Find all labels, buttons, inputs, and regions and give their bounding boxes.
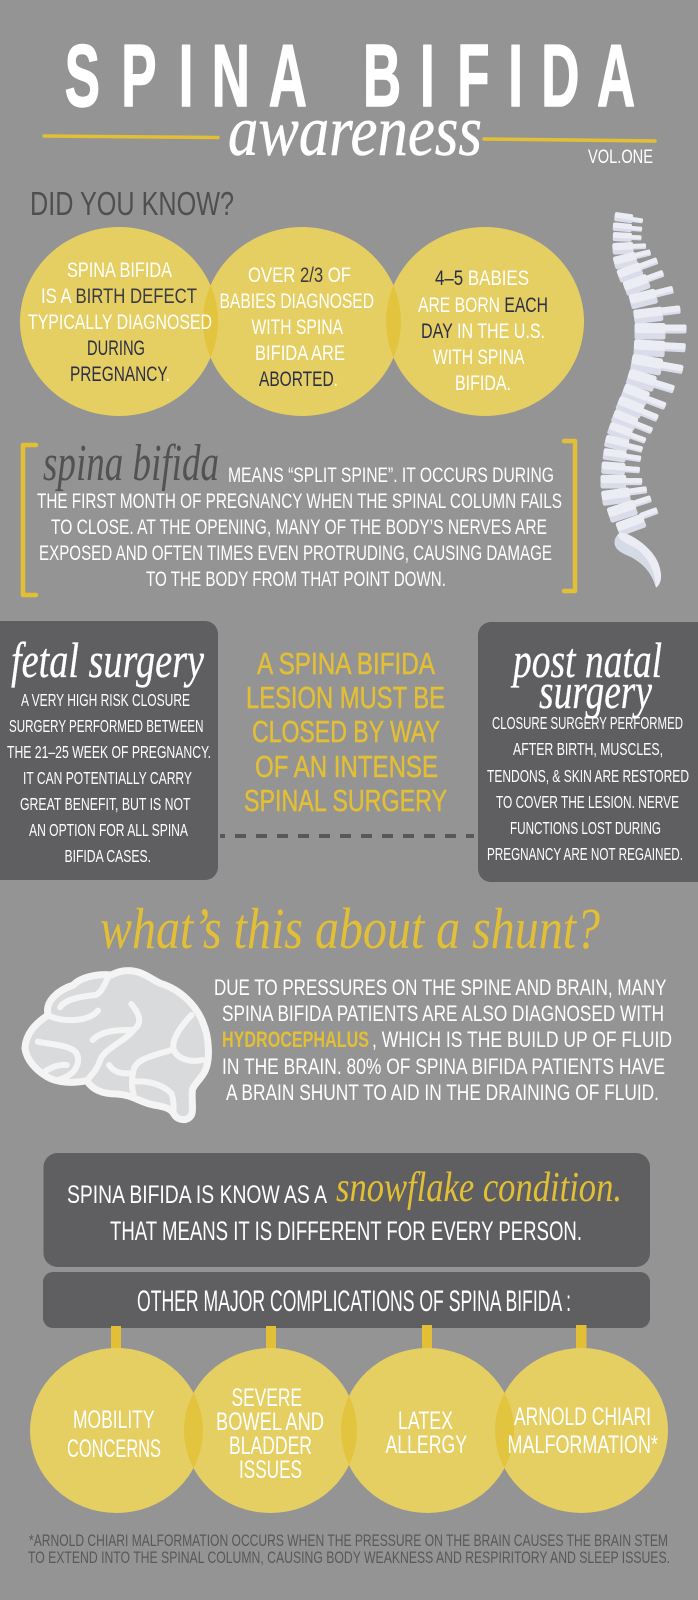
panel: other complications: [43, 1272, 650, 1328]
fetal surgery text: GREAT BENEFIT, BUT IS NOT: [20, 794, 191, 814]
callout: lesion must be closed: OF AN INTENSE: [255, 749, 438, 784]
circle: two thirds aborted: BABIES DIAGNOSED: [220, 290, 374, 313]
fetal surgery text: BIFIDA CASES.: [64, 846, 151, 866]
script heading: fetal surgery: fetal surgery: [11, 632, 205, 688]
circle: mobility: MOBILITY: [73, 1406, 155, 1434]
circle: latex allergy: ALLERGY: [386, 1431, 467, 1459]
callout: lesion must be closed: LESION MUST BE: [246, 680, 445, 715]
fetal surgery text: [7, 690, 211, 866]
right bracket: [564, 441, 575, 591]
panel: snowflake condition: SPINA BIFIDA IS KNOW AS A: [67, 1181, 327, 1209]
circle: birth defect: [20, 227, 218, 416]
connectors: [111, 1325, 586, 1349]
title: spina bifida: SPINABIFIDA: [65, 27, 635, 125]
circle: latex allergy: LATEX: [398, 1407, 453, 1435]
icon: brain: [25, 971, 208, 1120]
fetal surgery text: AN OPTION FOR ALL SPINA: [29, 820, 188, 840]
circle: two thirds aborted: [203, 227, 401, 416]
circle: two thirds aborted: OVER 2/3 OF: [248, 264, 351, 287]
shunt text: HYDROCEPHALUS: [222, 1027, 369, 1052]
circle: bowel and bladder: BOWEL AND: [216, 1408, 324, 1436]
circle: birth defect: SPINA BIFIDA: [67, 259, 172, 282]
circle: two thirds aborted: BIFIDA ARE: [255, 342, 345, 365]
circle: latex allergy: [341, 1348, 514, 1513]
circle: two thirds aborted: ABORTED.: [259, 368, 338, 391]
panel: fetal surgery: [0, 621, 218, 880]
shunt text: [214, 975, 672, 1105]
post natal surgery text: [487, 713, 689, 864]
callout: lesion must be closed: SPINAL SURGERY: [244, 783, 447, 818]
circle: bowel and bladder: ISSUES: [239, 1456, 302, 1484]
right yellow rule: [484, 139, 655, 141]
circle: babies born each day: DAY IN THE U.S.: [421, 320, 545, 343]
script: snowflake condition: snowflake condition.: [336, 1165, 622, 1211]
icon: spine: [601, 212, 686, 588]
footnote: [28, 1531, 670, 1567]
circle: bowel and bladder: SEVERE: [232, 1384, 302, 1412]
callout: lesion must be closed: [244, 646, 447, 818]
script heading: post natal surgery: surgery: [539, 663, 653, 719]
circle: babies born each day: WITH SPINA: [433, 346, 524, 369]
fetal surgery text: IT CAN POTENTIALLY CARRY: [23, 768, 192, 788]
circle: mobility: [30, 1348, 203, 1513]
definition block: [23, 435, 575, 595]
definition text: MEANS “SPLIT SPINE”. IT OCCURS DURING: [228, 464, 554, 487]
script term: spina bifida: spina bifida: [43, 435, 219, 492]
circle text: birth defect: [28, 285, 212, 386]
circle text: birth defect: PREGNANCY.: [70, 363, 170, 386]
definition text: TO THE BODY FROM THAT POINT DOWN.: [146, 568, 446, 591]
circle text: birth defect: IS A BIRTH DEFECT: [41, 285, 197, 308]
circle: arnold chiari: [495, 1348, 668, 1513]
fetal surgery text: SURGERY PERFORMED BETWEEN: [9, 716, 204, 736]
heading: shunt: what’s this about a shunt?: [100, 896, 600, 961]
heading: did you know: DID YOU KNOW?: [30, 185, 234, 222]
title block: [44, 27, 655, 171]
circle: babies born each day: 4–5 BABIES: [435, 267, 529, 290]
fetal surgery text: A VERY HIGH RISK CLOSURE: [21, 690, 190, 710]
circle: babies born each day: BIFIDA.: [455, 372, 511, 395]
circle: mobility: CONCERNS: [67, 1435, 161, 1463]
complications circles: [30, 1348, 668, 1513]
script heading: post natal surgery: [511, 632, 662, 719]
circle: bowel and bladder: BLADDER: [229, 1432, 312, 1460]
fetal surgery text: THE 21–25 WEEK OF PREGNANCY.: [7, 742, 211, 762]
subtitle: awareness: awareness: [228, 92, 482, 171]
callout: lesion must be closed: A SPINA BIFIDA: [257, 646, 435, 681]
left yellow rule: [44, 136, 218, 138]
circle: babies born each day: ARE BORN EACH: [418, 294, 548, 317]
volume label: VOL.ONE: [588, 146, 653, 168]
circle: two thirds aborted: WITH SPINA: [252, 316, 343, 339]
panel: snowflake condition: [44, 1153, 650, 1267]
circle: bowel and bladder: [184, 1348, 357, 1513]
circle text: birth defect: TYPICALLY DIAGNOSED: [28, 311, 212, 334]
circle text: birth defect: DURING: [87, 337, 145, 360]
dashed connector: [220, 834, 474, 838]
panel: post natal surgery: [478, 622, 698, 882]
facts circles: [20, 227, 584, 416]
callout: lesion must be closed: CLOSED BY WAY: [252, 714, 440, 749]
circle: babies born each day: [386, 227, 584, 416]
definition text: [37, 464, 562, 591]
left bracket: [23, 445, 36, 595]
